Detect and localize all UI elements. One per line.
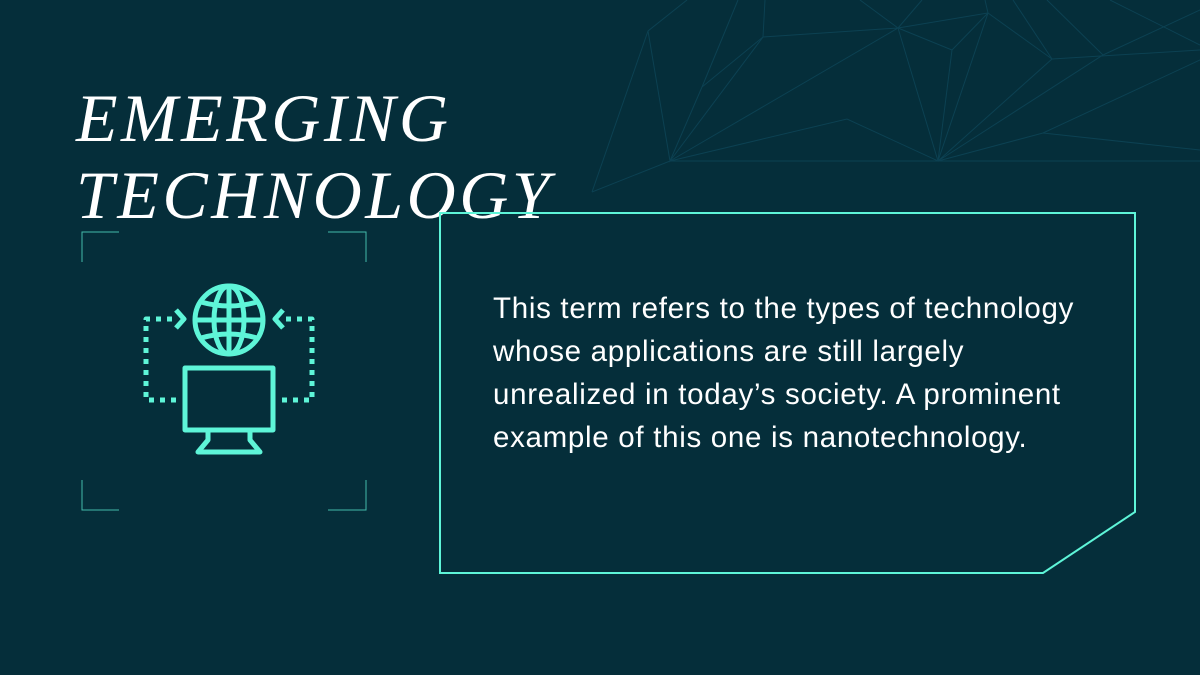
- dotted arrows: [146, 319, 312, 400]
- monitor: [185, 368, 273, 452]
- body text: [493, 292, 1074, 454]
- frame corners: [82, 232, 366, 510]
- title: EMERGING: [76, 80, 451, 156]
- body text: whose applications are still largely: [493, 335, 964, 368]
- icon: globe and computer with frame: [82, 232, 366, 510]
- title: TECHNOLOGY: [76, 157, 553, 233]
- body text: example of this one is nanotechnology.: [493, 421, 1027, 454]
- body text: This term refers to the types of technology: [493, 292, 1074, 325]
- title: [75, 80, 556, 233]
- body text: unrealized in today’s society. A prominent: [493, 378, 1061, 411]
- globe: [195, 286, 263, 354]
